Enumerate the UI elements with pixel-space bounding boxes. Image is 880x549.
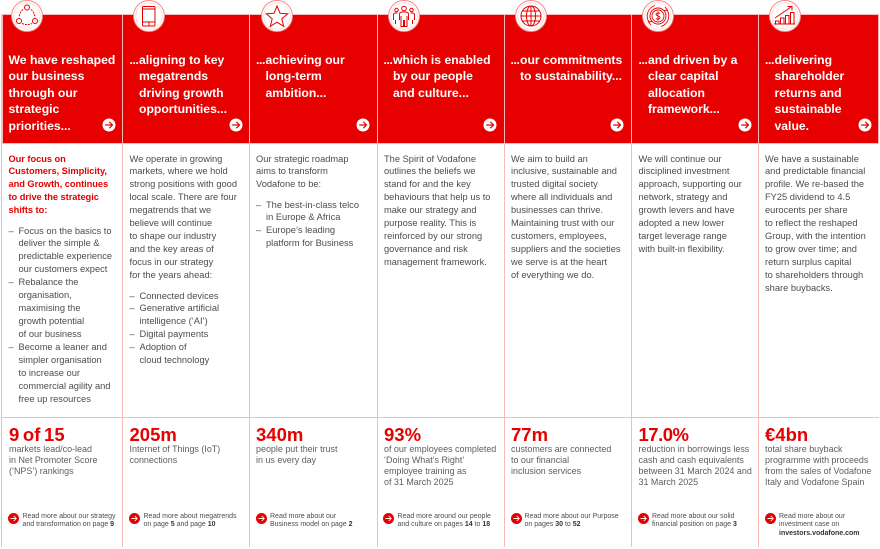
column 4 heading: and culture... <box>393 86 469 100</box>
column 7 body text: and predictable financial <box>765 166 865 176</box>
column 1 lead text <box>8 154 108 215</box>
header arrow 3 <box>356 118 370 132</box>
text: to increase our <box>18 368 80 378</box>
link text 2 <box>144 512 236 530</box>
column 6 heading: allocation <box>648 86 705 100</box>
column 6 heading: clear capital <box>648 69 718 83</box>
text: Generative artificial <box>140 303 219 313</box>
stat 5 description: to our financial <box>511 455 569 465</box>
column 5 body text: inclusive, sustainable and <box>511 166 617 176</box>
text: cloud technology <box>140 355 209 365</box>
column 2 body text: for the years ahead: <box>130 270 212 280</box>
column 2 heading: opportunities... <box>139 102 227 116</box>
stat 6 description: cash and cash equivalents <box>638 455 744 465</box>
stat 6 description: 31 March 2025 <box>638 477 698 487</box>
text: predictable experience <box>18 251 112 261</box>
column 2 body text: markets, where we hold <box>130 166 228 176</box>
column 3 heading <box>256 52 345 100</box>
link text 6 <box>652 512 737 530</box>
header arrow 1 <box>102 118 116 132</box>
link text 5: on pages 30 to 52 <box>524 521 581 528</box>
stat 7 description <box>765 444 871 487</box>
column 7 heading <box>765 52 844 132</box>
text: ... <box>638 52 647 66</box>
red header band <box>2 14 879 144</box>
column 1 lead text: Our focus on <box>8 154 66 164</box>
link text 7: investment case on <box>779 521 839 528</box>
column 7 heading: shareholder <box>774 69 844 83</box>
link text 3: Read more about our <box>270 512 336 520</box>
link text 3 <box>270 512 353 530</box>
stat 3 description: in us every day <box>256 455 316 465</box>
header arrow 5 <box>610 118 624 132</box>
column 7 heading: delivering <box>774 52 832 66</box>
column 4 heading: which is enabled <box>393 52 491 66</box>
link text 1: and transformation on page 9 <box>22 521 114 528</box>
text: Focus on the basics to <box>18 226 112 236</box>
stat 5 description <box>511 444 611 476</box>
column 6 heading: and driven by a <box>648 52 737 66</box>
stat 1 description: markets lead/co-lead <box>9 444 92 454</box>
column 2 bullet list: – <box>130 342 135 352</box>
column 4 heading: by our people <box>393 69 473 83</box>
link text 4: Read more around our people <box>398 512 491 520</box>
column 1 heading: our business <box>8 69 84 83</box>
text: platform for Business <box>266 238 353 248</box>
column 2 bullet list: – <box>130 329 135 339</box>
text: in Europe & Africa <box>266 212 340 222</box>
header arrow 6 <box>738 118 752 132</box>
text: commercial agility and <box>18 381 110 391</box>
column 4 body text: make our strategy and <box>384 205 477 215</box>
text: Adoption of <box>140 342 187 352</box>
column 1 heading: priorities... <box>8 118 71 132</box>
icon: globe <box>515 0 547 32</box>
text: free up resources <box>18 394 91 404</box>
link text 4 <box>398 512 491 530</box>
stat 2 figure: 205m <box>130 424 177 445</box>
link text 7: investors.vodafone.com <box>779 530 860 537</box>
column 5 heading: our commitments <box>520 52 622 66</box>
column 2 heading: driving growth <box>139 86 224 100</box>
column 3 body text: Vodafone to be: <box>256 179 321 189</box>
column 2 bullet list: – <box>130 290 135 300</box>
column 6 body text: target leverage range <box>638 231 727 241</box>
text: The best-in-class telco <box>266 200 359 210</box>
column 5 body text: customers, employees, <box>511 231 607 241</box>
column 4 body text <box>384 154 490 267</box>
column 3 bullet list: – <box>256 225 261 235</box>
column 7 body text: share buybacks. <box>765 283 833 293</box>
icon: smartphone <box>133 0 165 32</box>
stat 6 description <box>638 444 752 487</box>
link icon 7 <box>765 513 776 524</box>
text: Digital payments <box>140 329 208 339</box>
link text 6: Read more about our solid <box>652 512 734 520</box>
stat 5 description: inclusion services <box>511 466 581 476</box>
column 5 body text: we serve is at the heart <box>511 257 607 267</box>
stat 4 description: of 31 March 2025 <box>384 477 454 487</box>
stat 7 description: from the sales of Vodafone <box>765 466 871 476</box>
column 6 body text: network, strategy and <box>638 192 727 202</box>
column 2 body text: believe will continue <box>130 218 212 228</box>
stat 4 description: of our employees completed <box>384 444 496 454</box>
column 3 heading: long-term <box>266 69 322 83</box>
stat 7 figure: €4bn <box>765 424 808 445</box>
column 2 body text: focus in our strategy <box>130 257 213 267</box>
header arrow 2 <box>230 118 242 132</box>
link text 5: Read more about our Purpose <box>524 512 619 520</box>
column 7 heading: sustainable <box>774 102 842 116</box>
column 5 body text: where all individuals and <box>511 192 612 202</box>
column 1 heading: strategic <box>8 102 59 116</box>
column 2 body text: strong positions with good <box>130 179 237 189</box>
text: ... <box>130 52 138 66</box>
column 3 body text <box>256 154 348 189</box>
icon: strategic priorities cycle <box>11 0 43 32</box>
stat 2 description <box>130 444 220 465</box>
stat 3 description: people put their trust <box>256 444 337 454</box>
link text 7 <box>779 512 860 539</box>
link text 2: on page 5 and page 10 <box>144 521 216 528</box>
column 2 body text: and the key areas of <box>130 244 214 254</box>
column 3 bullet list <box>256 200 262 235</box>
link icon 2 <box>129 513 140 524</box>
column 6 body text: disciplined investment <box>638 166 729 176</box>
column 7 body text: to shareholders through <box>765 270 863 280</box>
column 7 body text: profile. We re-based the <box>765 179 864 189</box>
stat 2 description: connections <box>130 455 177 465</box>
text: Rebalance the <box>18 277 78 287</box>
stat 7 description: total share buyback <box>765 444 843 454</box>
column 1 bullet list: – <box>8 226 14 236</box>
column 7 body text <box>765 154 866 293</box>
column 2 heading <box>130 52 227 116</box>
column 4 body text: management framework. <box>384 257 487 267</box>
column 5 body text: businesses can thrive. <box>511 205 603 215</box>
column 4 body text: stand for and the key <box>384 179 471 189</box>
column 5 body text: We aim to build an <box>511 154 588 164</box>
stat 7 description: programme with proceeds <box>765 455 868 465</box>
column 4 body text: purpose reality. This is <box>384 218 476 228</box>
column 3 heading: ambition... <box>266 86 326 100</box>
text: ... <box>384 52 392 66</box>
text: deliver the simple & <box>18 238 100 248</box>
column 3 body text: aims to transform <box>256 166 328 176</box>
column 5 body text: of everything we do. <box>511 270 594 280</box>
column 6 heading: framework... <box>648 102 720 116</box>
column 2 bullet list: – <box>130 303 135 313</box>
column 7 body text: We have a sustainable <box>765 154 859 164</box>
column 5 heading <box>510 52 622 83</box>
text: organisation, <box>18 290 72 300</box>
stat 1 description: (‘NPS’) rankings <box>9 466 74 476</box>
stat 5 figure: 77m <box>511 424 548 445</box>
header arrow 7 <box>858 118 872 132</box>
link text 3: Business model on page 2 <box>270 521 353 528</box>
column 5 body text <box>511 154 621 280</box>
column 2 body text: to shape our industry <box>130 231 216 241</box>
stat 4 description: employee training as <box>384 466 466 476</box>
column 4 body text: The Spirit of Vodafone <box>384 154 476 164</box>
header arrow 4 <box>484 118 496 132</box>
column 4 body text: outlines the beliefs we <box>384 166 475 176</box>
column 4 heading <box>384 52 491 100</box>
column 2 body text: megatrends that we <box>130 205 211 215</box>
column 1 lead text: Customers, Simplicity, <box>8 166 107 176</box>
column 2 body text <box>130 154 237 280</box>
link icon 3 <box>256 513 267 524</box>
stat 7 description: Italy and Vodafone Spain <box>765 477 864 487</box>
column 7 body text: eurocents per share <box>765 205 848 215</box>
link icon 5 <box>510 513 522 524</box>
icon: people <box>388 0 420 32</box>
stat 6 figure: 17.0% <box>638 424 688 445</box>
column 2 body text: We operate in growing <box>130 154 222 164</box>
link icon 6 <box>638 513 649 524</box>
stat 5 description: customers are connected <box>511 444 611 454</box>
stat 4 figure: 93% <box>384 424 421 445</box>
column 2 heading: aligning to key <box>139 52 224 66</box>
column 6 body text: approach, supporting our <box>638 179 742 189</box>
column 2 body text: local scale. There are four <box>130 192 237 202</box>
column 5 body text: trusted digital society <box>511 179 598 189</box>
text: Become a leaner and <box>18 342 107 352</box>
column 7 heading: returns and <box>774 86 842 100</box>
text: ... <box>765 52 774 66</box>
column 1 heading: We have reshaped <box>8 52 115 66</box>
stat 6 description: reduction in borrowings less <box>638 444 749 454</box>
column 3 heading: achieving our <box>266 52 345 66</box>
column 6 body text: growth levers and have <box>638 205 735 215</box>
column 1 bullet list <box>8 226 14 352</box>
link icon 4 <box>383 513 394 524</box>
column 6 body text: We will continue our <box>638 154 722 164</box>
stat 1 description <box>9 444 98 476</box>
column 1 bullet list: – <box>8 342 14 352</box>
column 1 heading <box>8 52 115 132</box>
link text 1 <box>22 512 116 528</box>
text: Europe’s leading <box>266 225 335 235</box>
text: ... <box>256 52 265 66</box>
column 1 lead text: to drive the strategic <box>8 192 99 202</box>
column 1 heading: through our <box>8 86 78 100</box>
stat 3 figure: 340m <box>256 424 303 445</box>
column 6 body text: adopted a new lower <box>638 218 724 228</box>
stat 1 figure: 9 of 15 <box>9 424 65 445</box>
column 6 heading <box>638 52 738 116</box>
link text 4: and culture on pages 14 to 18 <box>398 521 490 528</box>
link text 1: Read more about our strategy <box>22 512 116 520</box>
text: maximising the <box>18 303 81 313</box>
stat 2 description: Internet of Things (IoT) <box>130 444 220 454</box>
column 5 body text: suppliers and the societies <box>511 244 621 254</box>
column 4 body text: reinforced by our strong <box>384 231 482 241</box>
stat 1 description: in Net Promoter Score <box>9 455 97 465</box>
column 7 body text: return surplus capital <box>765 257 851 267</box>
column 6 body text: with built-in flexibility. <box>638 244 725 254</box>
column 1 lead text: shifts to: <box>8 205 47 215</box>
link icon 1 <box>8 513 19 524</box>
column 2 heading: megatrends <box>139 69 208 83</box>
text: ... <box>510 52 519 66</box>
link text 2: Read more about megatrends <box>144 512 236 520</box>
text: intelligence (‘AI’) <box>140 316 208 326</box>
text: simpler organisation <box>18 355 102 365</box>
stat 6 description: between 31 March 2024 and <box>638 466 752 476</box>
column 6 body text <box>638 154 742 254</box>
stat 3 description <box>256 444 338 465</box>
column 1 bullet list: – <box>8 277 14 287</box>
link text 6: financial position on page 3 <box>652 521 737 528</box>
link text 5 <box>524 512 619 530</box>
stat 4 description <box>384 444 496 487</box>
column 7 body text: to reflect the reshaped <box>765 218 858 228</box>
column 7 body text: to grow over time; and <box>765 244 857 254</box>
column 3 body text: Our strategic roadmap <box>256 154 348 164</box>
column 7 body text: Group, with the intention <box>765 231 866 241</box>
text: Connected devices <box>140 290 219 300</box>
column 1 lead text: and Growth, continues <box>8 179 108 189</box>
column 5 heading: to sustainability... <box>520 69 622 83</box>
column 7 body text: FY25 dividend to 4.5 <box>765 192 850 202</box>
column 7 heading: value. <box>774 118 809 132</box>
icon: capital cycle with dollar <box>642 0 674 32</box>
column 5 body text: Maintaining trust with our <box>511 218 614 228</box>
text: growth potential <box>18 316 84 326</box>
column 2 bullet list <box>130 290 135 352</box>
text: of our business <box>18 329 82 339</box>
text: our customers expect <box>18 264 107 274</box>
link text 7: Read more about our <box>779 512 845 520</box>
column 4 body text: behaviours that help us to <box>384 192 490 202</box>
column 3 bullet list: – <box>256 200 261 210</box>
stat 4 description: ‘Doing What’s Right’ <box>384 455 464 465</box>
column 4 body text: governance and risk <box>384 244 468 254</box>
icon: star <box>261 0 293 32</box>
icon: rising bar chart <box>769 0 801 32</box>
